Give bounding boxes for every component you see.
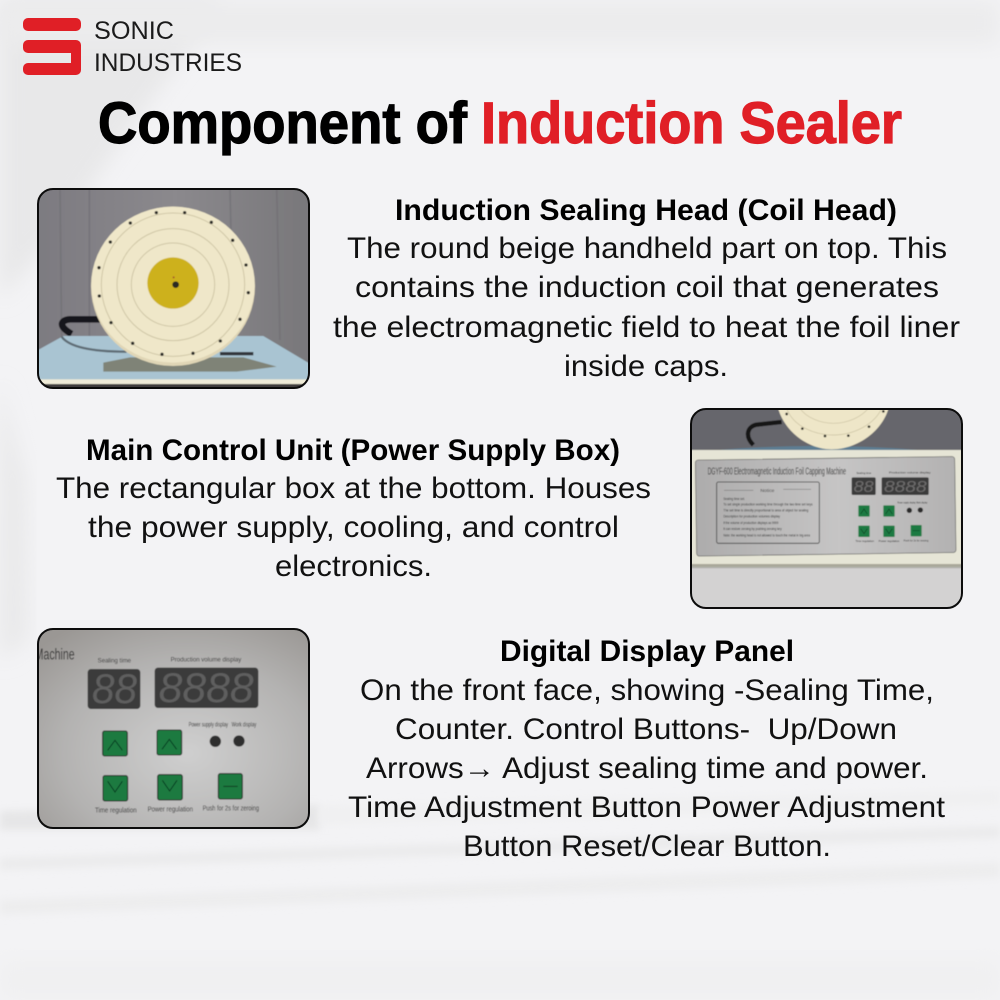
photo: main control unit: Description for production volumes display xyxy=(723,515,780,519)
description: display panel: Counter. Control Buttons- Up/Down xyxy=(395,713,897,746)
heading: sealing head: Induction Sealing Head (Coil Head) xyxy=(395,194,897,227)
title: Induction Sealer xyxy=(481,91,902,156)
description: display panel: On the front face, showing -Sealing Time, xyxy=(360,674,934,707)
text block: digital display panel xyxy=(348,635,946,863)
photo: main control unit: Notice xyxy=(760,488,775,494)
heading: control unit: Main Control Unit (Power Supply Box) xyxy=(86,434,620,467)
description: sealing head: contains the induction coil that generates xyxy=(355,271,939,304)
photo: main control unit: 88 xyxy=(854,479,874,496)
description: sealing head: The round beige handheld part on top. This xyxy=(347,232,947,265)
description: control unit: the power supply, cooling, and control xyxy=(88,511,619,544)
photo: digital display panel: Work display xyxy=(232,723,256,729)
photo: digital display panel: Power regulation xyxy=(148,806,193,813)
logo wordmark: SONIC xyxy=(94,17,174,45)
description: display panel xyxy=(348,674,946,863)
description: display panel: Arrows→ Adjust sealing time and power. xyxy=(366,752,928,785)
text block: main control unit xyxy=(56,434,651,583)
photo: main control unit: Sealing time xyxy=(856,471,872,475)
description: control unit: electronics. xyxy=(275,550,432,583)
description: sealing head: inside caps. xyxy=(564,350,728,383)
description: control unit: The rectangular box at the bottom. Houses xyxy=(56,472,651,505)
photo: main control unit: The set time is directly proportional to area of object for sealing xyxy=(723,509,808,513)
photo: digital display panel: Time regulation xyxy=(95,807,137,814)
photo: main control unit: Push for 2s for zeroing xyxy=(904,538,929,542)
photo: digital display panel: Push for 2s for zeroing xyxy=(203,805,259,812)
title xyxy=(98,91,902,156)
photo: digital display panel: Sealing time xyxy=(98,658,131,665)
photo: main control unit: DGYF-600 Electromagnetic Induction Foil Capping Machine xyxy=(708,467,846,478)
description: sealing head: the electromagnetic field to heat the foil liner xyxy=(333,311,960,344)
logo: Sonic Industries xyxy=(23,17,242,77)
photo: digital display panel: Production volume display xyxy=(171,657,242,664)
photo: digital display panel: Power supply display xyxy=(189,723,228,729)
photo: main control unit: Note: the working head is not allowed to touch the metal in big area xyxy=(723,534,810,538)
photo: main control unit: Power regulation xyxy=(879,539,900,543)
description: sealing head xyxy=(333,232,960,383)
text block: induction sealing head xyxy=(333,194,960,383)
photo: digital display panel: 88 xyxy=(92,665,137,712)
photo: digital display panel xyxy=(35,627,312,830)
photo: digital display panel: 8888 xyxy=(159,664,254,711)
photo: main control unit: Sealing time set. xyxy=(723,497,745,501)
photo: main control unit xyxy=(685,407,970,610)
description: display panel: Button Reset/Clear Button. xyxy=(463,830,831,863)
logo wordmark xyxy=(94,17,242,77)
photo: main control unit: To set single production working time through the two time set keys xyxy=(723,502,813,506)
photo: main control unit: Power supply display Work display xyxy=(897,500,928,504)
photo: digital display panel: Machine xyxy=(35,646,75,663)
photo: main control unit: If the volume of production displays as 9999 xyxy=(723,521,778,525)
photo: main control unit: Time regulation xyxy=(855,539,875,543)
description: control unit xyxy=(56,472,651,583)
photo: main control unit: 8888 xyxy=(884,479,927,496)
logo wordmark: INDUSTRIES xyxy=(94,49,242,77)
description: display panel: Time Adjustment Button Power Adjustment xyxy=(348,791,946,824)
photo: main control unit: It can restore zeroing by pushing zeroing key xyxy=(723,527,782,531)
photo: main control unit: Production volume display xyxy=(889,471,931,475)
icon: red S mark xyxy=(23,18,81,75)
photo: induction sealing head xyxy=(37,188,310,389)
title: Component of xyxy=(98,91,468,156)
heading: display panel: Digital Display Panel xyxy=(500,635,794,668)
